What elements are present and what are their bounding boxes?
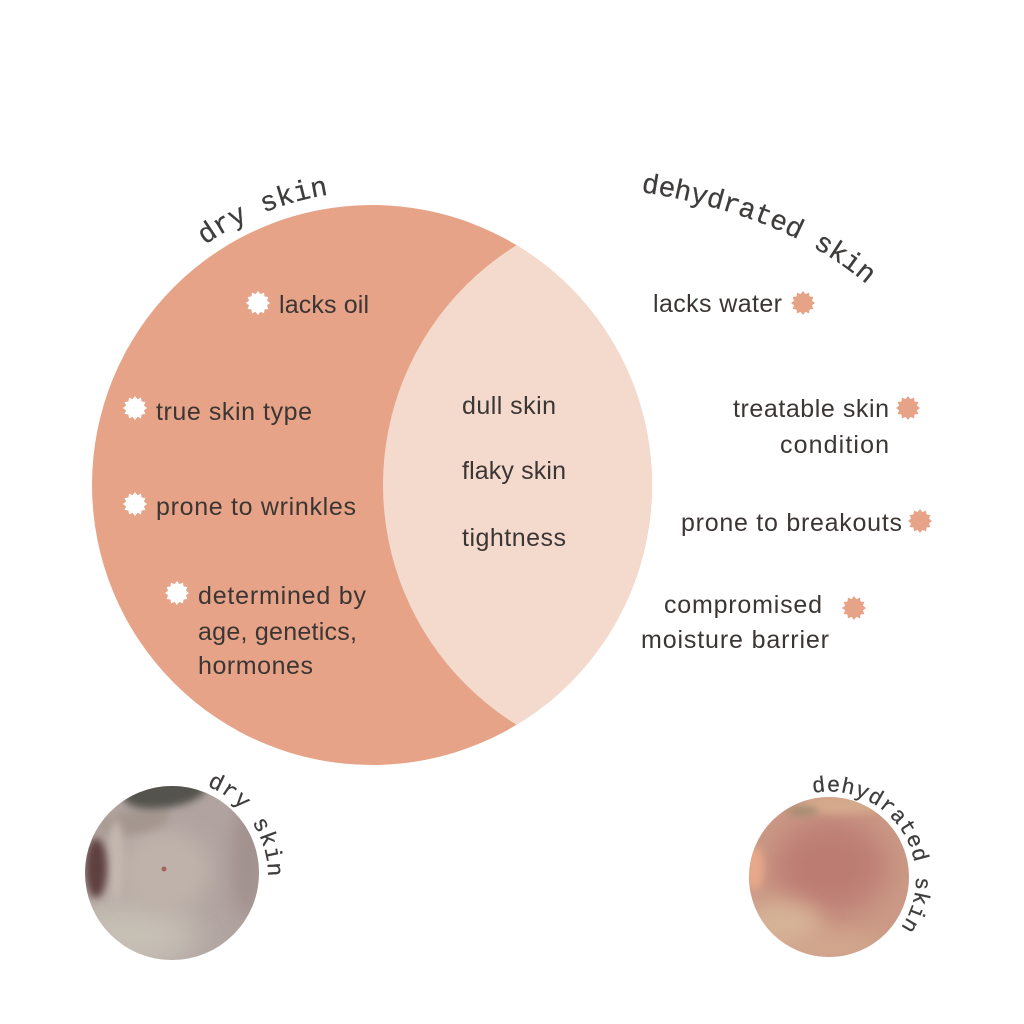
item: determined by age, genetics, hormones: age, genetics, (198, 618, 357, 646)
item: dull skin: dull skin (462, 392, 556, 420)
heading: dehydrated skin curved: dehydrated skin (644, 174, 873, 283)
item: treatable skin condition (733, 395, 920, 459)
list: shared traits (462, 392, 566, 552)
list: dehydrated skin traits (641, 290, 932, 654)
photo: dry skin (85, 786, 259, 960)
item: treatable skin condition: treatable skin (733, 395, 889, 423)
panel: venn diagram (92, 205, 652, 765)
caption: dehydrated skin photo label: dehydrated skin (813, 776, 931, 932)
overlap: dehydrated crescent (383, 246, 652, 724)
item: determined by age, genetics, hormones: hormones (198, 652, 313, 680)
item: compromised moisture barrier: moisture barrier (641, 626, 829, 654)
circle: dry skin (92, 205, 652, 765)
item: treatable skin condition: condition (780, 431, 889, 459)
item: compromised moisture barrier: compromised (664, 591, 822, 619)
caption: dry skin photo label: dry skin (210, 774, 283, 875)
item: determined by age, genetics, hormones (165, 581, 366, 680)
item: lacks water: lacks water (653, 290, 782, 318)
item: prone to wrinkles: prone to wrinkles (156, 493, 356, 521)
item: tightness: tightness (462, 524, 566, 552)
item: determined by age, genetics, hormones: determined by (198, 582, 366, 610)
item: compromised moisture barrier (641, 591, 866, 654)
item: flaky skin: flaky skin (462, 457, 566, 485)
item: lacks oil: lacks oil (279, 291, 369, 319)
item: prone to breakouts: prone to breakouts (681, 509, 902, 537)
photo: dehydrated skin (742, 796, 909, 962)
list: dry skin traits (123, 291, 369, 680)
heading: dry skin curved: dry skin (200, 180, 326, 242)
item: true skin type: true skin type (156, 398, 312, 426)
